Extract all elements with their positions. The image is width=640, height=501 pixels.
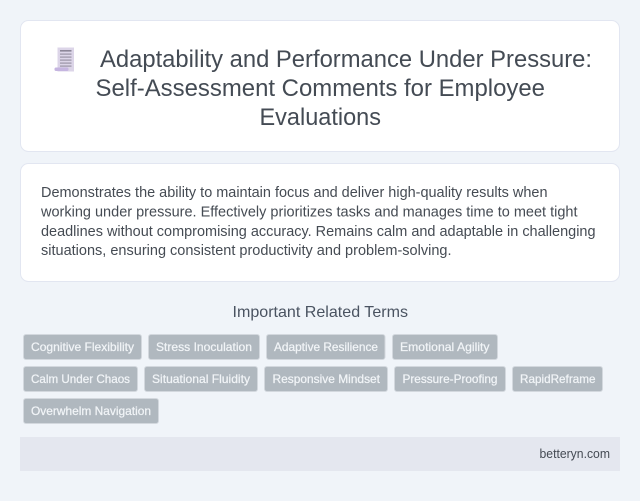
title	[96, 46, 592, 131]
tag: Pressure-Proofing: Pressure-Proofing	[402, 372, 498, 386]
footer	[20, 437, 620, 471]
tag: Cognitive Flexibility	[24, 334, 142, 360]
tag: RapidReframe	[512, 366, 602, 392]
tag: RapidReframe: RapidReframe	[520, 372, 596, 386]
tag: Stress Inoculation	[148, 334, 260, 360]
tag: Situational Fluidity: Situational Fluidity	[152, 372, 250, 386]
tag: Stress Inoculation: Stress Inoculation	[156, 340, 252, 354]
description text: working under pressure. Effectively prioritizes tasks and manages time to meet tight	[40, 204, 577, 220]
description text: Demonstrates the ability to maintain focus and deliver high-quality results when	[41, 185, 548, 201]
tag: Calm Under Chaos: Calm Under Chaos	[31, 372, 130, 386]
description text: deadlines without compromising accuracy. Remains calm and adaptable in challenging	[41, 224, 596, 240]
tag: Responsive Mindset	[264, 366, 388, 392]
icon: document scroll	[54, 48, 74, 72]
panel: title card	[20, 20, 620, 152]
tag: Overwhelm Navigation	[24, 398, 158, 424]
title: Self-Assessment Comments for Employee	[96, 75, 545, 102]
description text	[40, 185, 595, 259]
panel: description card	[20, 164, 620, 282]
tag: Pressure-Proofing	[394, 366, 506, 392]
tags: related terms	[24, 334, 602, 424]
tag: Overwhelm Navigation: Overwhelm Navigation	[31, 404, 151, 418]
tag: Adaptive Resilience	[266, 334, 385, 360]
tag: Emotional Agility	[392, 334, 498, 360]
tag: Adaptive Resilience: Adaptive Resilience	[274, 340, 378, 354]
tag: Responsive Mindset: Responsive Mindset	[272, 372, 381, 386]
title: Evaluations	[260, 104, 381, 131]
description text: situations, ensuring consistent productivity and problem-solving.	[41, 243, 452, 259]
tag: Calm Under Chaos	[24, 366, 138, 392]
footer site name: betteryn.com	[540, 447, 610, 461]
tag: Situational Fluidity	[144, 366, 258, 392]
title: Adaptability and Performance Under Pressure:	[100, 46, 592, 73]
tag: Cognitive Flexibility: Cognitive Flexibility	[31, 340, 134, 354]
tag: Emotional Agility: Emotional Agility	[400, 340, 490, 354]
heading: important related terms: Important Related Terms	[232, 304, 408, 321]
